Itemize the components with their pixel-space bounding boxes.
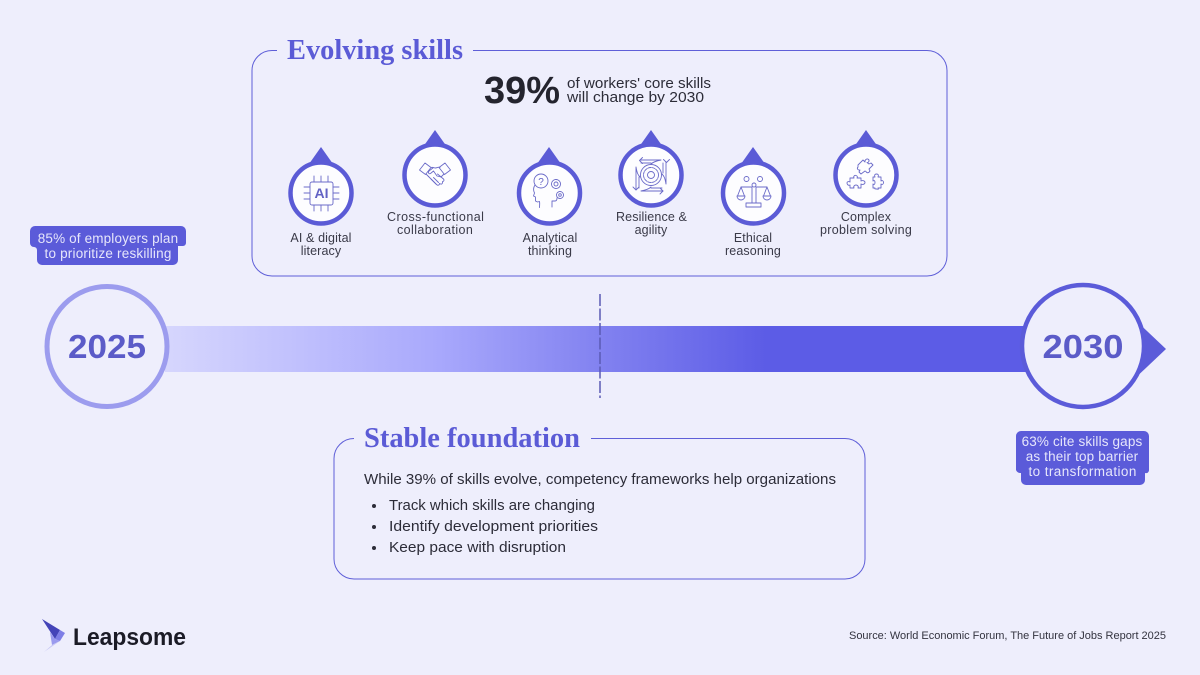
icon: AI chip — [304, 176, 339, 211]
skill: ethical reasoning: reasoning — [725, 244, 781, 258]
stat: 39 percent: 39% — [484, 70, 560, 112]
icon: puzzle pieces — [847, 159, 884, 189]
skill: complex problem solving: problem solving — [820, 223, 912, 237]
icon: gear with arrows — [633, 158, 670, 194]
skill: AI and digital literacy: AI — [314, 185, 328, 201]
skill: cross-functional collaboration — [387, 130, 484, 237]
callout: 63 percent cite skills gaps: as their top barrier — [1026, 449, 1139, 464]
icon: handshake — [420, 163, 450, 185]
stat description: of workers' core skills — [567, 76, 711, 92]
icon: scales — [737, 176, 771, 207]
heading: evolving skills: Evolving skills — [287, 35, 463, 66]
skill: complex problem solving: Complex — [841, 210, 892, 224]
callout: 63 percent cite skills gaps: to transformation — [1028, 464, 1136, 479]
skill: analytical thinking — [519, 147, 580, 258]
year marker: 2030 — [1022, 285, 1144, 407]
timeline arrow — [165, 315, 1166, 383]
skill: analytical thinking: Analytical — [523, 231, 577, 245]
callout: 63 percent cite skills gaps: 63% cite skills gaps — [1022, 434, 1142, 449]
callout: 85 percent of employers — [30, 226, 186, 265]
logo: Leapsome: Leapsome — [73, 624, 186, 651]
skill: AI and digital literacy — [290, 147, 352, 258]
skill: complex problem solving — [820, 130, 912, 237]
bullet list: Keep pace with disruption — [389, 540, 566, 556]
panel: evolving skills — [252, 35, 947, 276]
skill: ethical reasoning: Ethical — [734, 231, 772, 245]
skill: ethical reasoning — [723, 147, 784, 258]
skill: resilience and agility — [616, 130, 687, 237]
callout: 63 percent cite skills gaps — [1016, 431, 1149, 485]
stat description: will change by 2030 — [566, 90, 704, 106]
year marker: 2030: 2030 — [1042, 328, 1124, 365]
heading: stable foundation: Stable foundation — [364, 423, 580, 454]
skill: AI and digital literacy: literacy — [301, 244, 342, 258]
skill: analytical thinking: thinking — [528, 244, 572, 258]
year marker: 2025: 2025 — [68, 328, 146, 365]
skill: analytical thinking: ? — [538, 177, 544, 188]
panel: stable foundation — [334, 423, 865, 579]
bullet list: Identify development priorities — [389, 519, 598, 535]
intro text: While 39% of skills evolve, competency frameworks help organizations — [364, 472, 836, 488]
dashed midpoint marker — [599, 294, 601, 398]
year marker: 2025 — [47, 286, 167, 406]
skill: resilience and agility: agility — [635, 223, 668, 237]
callout: 85 percent of employers: 85% of employers plan — [38, 231, 178, 246]
bullet list: Track which skills are changing — [389, 498, 595, 514]
bullet list — [372, 498, 598, 556]
logo: Leapsome — [42, 619, 186, 652]
source note: Source: World Economic Forum, The Future of Jobs Report 2025 — [849, 630, 1166, 642]
skill: AI and digital literacy: AI & digital — [290, 231, 352, 245]
icon: head with gears — [534, 174, 564, 208]
callout: 85 percent of employers: to prioritize reskilling — [44, 246, 172, 261]
skill: cross-functional collaboration: collaboration — [397, 223, 473, 237]
skill: cross-functional collaboration: Cross-functional — [387, 210, 484, 224]
skill: resilience and agility: Resilience & — [616, 210, 687, 224]
